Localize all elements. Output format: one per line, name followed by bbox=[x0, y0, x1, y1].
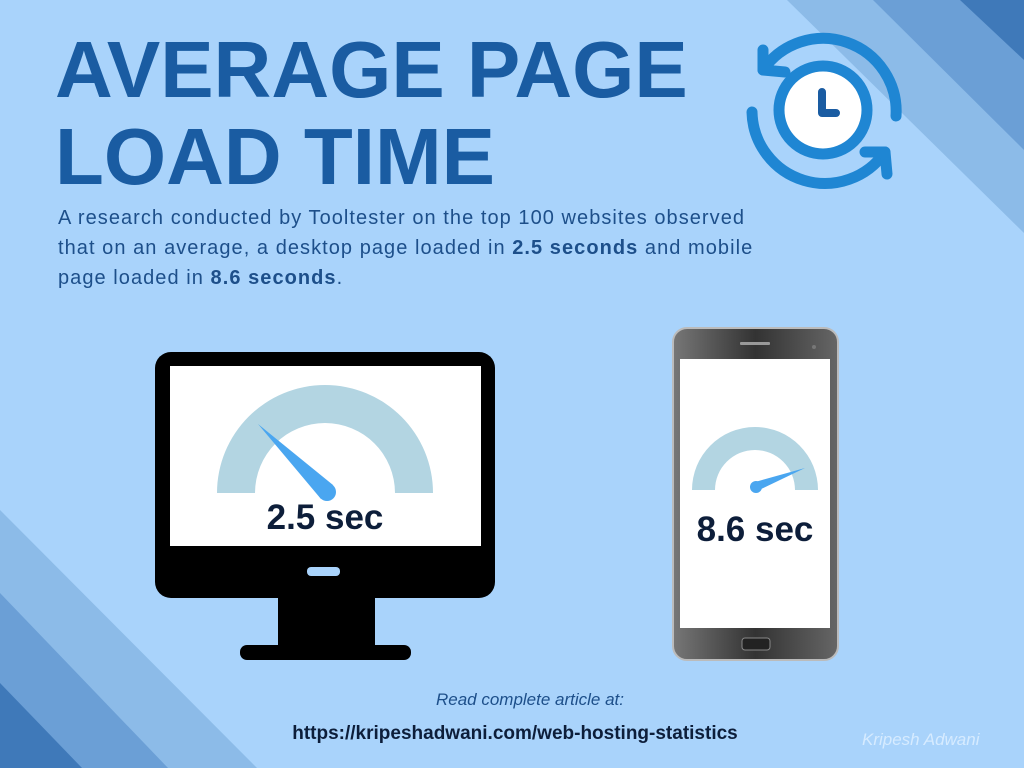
description: A research conducted by Tooltester on the top 100 websites observed bbox=[58, 207, 745, 229]
desktop monitor bbox=[155, 352, 495, 660]
title bbox=[55, 25, 688, 201]
description: that on an average, a desktop page loaded in 2.5 seconds and mobile bbox=[58, 237, 753, 259]
title: AVERAGE PAGE bbox=[55, 25, 688, 114]
description bbox=[58, 207, 753, 289]
mobile phone bbox=[672, 327, 839, 661]
mobile value: 8.6 sec bbox=[697, 510, 813, 549]
desktop value: 2.5 sec bbox=[267, 498, 383, 537]
footer label: Read complete article at: bbox=[436, 690, 624, 709]
footer url: https://kripeshadwani.com/web-hosting-statistics bbox=[292, 723, 738, 744]
icon: clock refresh bbox=[746, 32, 902, 189]
title: LOAD TIME bbox=[55, 112, 495, 201]
signature: Kripesh Adwani bbox=[862, 730, 980, 749]
gauge mobile bbox=[692, 427, 818, 493]
gauge desktop bbox=[217, 385, 433, 501]
description: page loaded in 8.6 seconds. bbox=[58, 267, 343, 289]
